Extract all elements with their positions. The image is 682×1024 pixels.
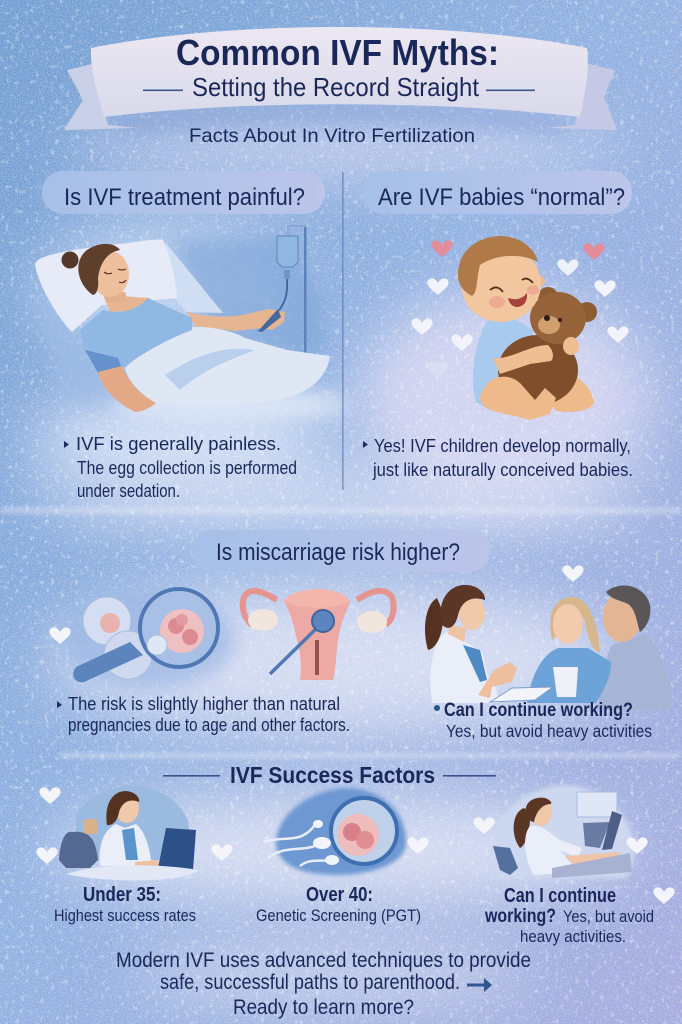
pillow	[35, 240, 177, 332]
ponytail	[514, 808, 530, 848]
embryo	[160, 609, 204, 653]
body text: normal: just like naturally conceived babies.	[372, 459, 633, 480]
factor: continue working	[484, 885, 654, 946]
desk	[552, 853, 632, 878]
band divider	[60, 753, 680, 758]
banner shadow	[110, 104, 575, 135]
divider	[342, 172, 344, 490]
egg cell	[83, 597, 131, 645]
ears	[469, 298, 483, 312]
factor: continue working: working?	[484, 906, 556, 927]
coat	[100, 824, 152, 866]
illustration: patient in hospital bed	[35, 225, 350, 423]
arrow	[467, 978, 492, 992]
small bubble	[147, 635, 167, 655]
clipboard	[490, 687, 553, 702]
factor: under 35	[54, 884, 196, 925]
teddy body	[498, 335, 578, 405]
banner ribbon	[91, 27, 588, 117]
section heading: IVF Success Factors	[230, 762, 435, 788]
monitor	[158, 828, 196, 870]
baby face	[489, 279, 539, 308]
illustration: uterus	[243, 589, 394, 680]
woman face	[553, 604, 583, 644]
baby hair	[458, 236, 538, 296]
body text: risk: pregnancies due to age and other factors.	[68, 714, 350, 735]
factor: continue working: Yes, but avoid	[563, 908, 654, 926]
shirt	[473, 316, 533, 410]
closing message	[116, 949, 531, 1019]
factor: under 35: Under 35:	[83, 884, 161, 906]
face	[115, 793, 139, 823]
woman hair	[550, 597, 600, 652]
subtitle: Setting the Record Straight	[192, 72, 480, 102]
panel: IVF babies normal	[362, 171, 633, 480]
factor: under 35: Highest success rates	[54, 907, 196, 925]
monitor	[583, 822, 610, 848]
body text: painful: The egg collection is performed	[77, 458, 297, 478]
right leg	[549, 370, 594, 412]
near arm	[98, 366, 156, 412]
body text: continue working: Can I continue working?	[444, 700, 633, 721]
hands	[135, 860, 158, 868]
IV device	[257, 309, 281, 332]
left thigh	[480, 377, 556, 420]
baby arm	[493, 345, 553, 374]
body text: continue working	[434, 700, 652, 741]
doctor hair	[441, 585, 485, 628]
blue backdrop	[170, 236, 325, 358]
face	[91, 251, 129, 297]
man shirt	[598, 634, 672, 710]
hearts	[411, 240, 629, 378]
illustration: doctor at computer	[59, 786, 198, 880]
heading pill: normal: Are IVF babies “normal”?	[378, 184, 625, 211]
man hair	[606, 586, 650, 632]
body text: continue working: Yes, but avoid heavy activities	[446, 721, 652, 741]
body text: painful	[64, 433, 297, 501]
teddy head	[530, 292, 586, 344]
arm	[565, 852, 620, 866]
backrest pillow	[165, 242, 223, 313]
illustration: doctor at workstation	[491, 785, 635, 878]
teddy ears	[538, 287, 558, 307]
heading pill: normal	[362, 171, 632, 214]
illustration: baby with teddy bear	[411, 236, 629, 420]
body text: risk: The risk is slightly higher than natural	[68, 693, 340, 714]
woman cardigan	[527, 648, 611, 703]
teddy paw hand	[563, 337, 579, 355]
panel: IVF success factors	[36, 565, 675, 946]
hearts around factors	[36, 565, 675, 904]
baby head	[461, 246, 541, 322]
doctor coat	[431, 632, 498, 703]
illustration: sperm and embryo	[263, 788, 406, 875]
closing message: Ready to learn more?	[233, 996, 414, 1019]
factor: over 40: Over 40:	[306, 884, 373, 906]
ovaries	[248, 609, 278, 631]
doctor scrubs	[463, 645, 487, 682]
banner right tail	[546, 64, 617, 130]
man face	[603, 592, 641, 642]
face details	[104, 269, 126, 283]
hair	[526, 798, 551, 822]
magnifier handle	[73, 642, 143, 682]
chest	[103, 295, 150, 312]
clinic backdrop	[76, 786, 192, 860]
hair bun	[62, 252, 78, 268]
panel: is IVF painful	[35, 171, 350, 501]
mattress shading	[35, 285, 135, 405]
face	[530, 798, 552, 826]
illustration: doctor with couple	[425, 585, 672, 710]
probe	[270, 622, 323, 674]
sperm	[263, 825, 330, 866]
doctor arm	[478, 662, 517, 698]
body text: risk	[57, 693, 350, 735]
far arm	[187, 309, 285, 331]
heading pill: miscarriage	[192, 530, 490, 572]
chart on wall	[577, 792, 617, 817]
panel: miscarriage risk	[57, 530, 672, 741]
title banner	[64, 27, 617, 135]
factor: continue working: heavy activities.	[520, 928, 626, 946]
chair	[59, 832, 98, 868]
lens ring	[331, 798, 397, 864]
doctor face	[459, 596, 485, 630]
coat	[525, 826, 582, 875]
illustration: embryo under magnifier	[65, 589, 235, 688]
wall board	[83, 819, 97, 834]
magnifier lens	[140, 589, 218, 667]
neck	[104, 292, 128, 302]
title: Common IVF Myths:	[176, 32, 499, 73]
cervix canal	[315, 640, 319, 675]
doctor neck	[448, 625, 466, 642]
banner left tail	[64, 64, 137, 130]
uterus body	[284, 601, 350, 680]
heading pill: painful	[42, 171, 325, 214]
closing message: Modern IVF uses advanced techniques to provide	[116, 949, 531, 972]
blanket	[125, 327, 330, 406]
desk	[66, 865, 198, 880]
sleeve	[85, 350, 122, 373]
heading pill: painful: Is IVF treatment painful?	[64, 184, 305, 211]
factor: over 40	[256, 884, 421, 925]
gown	[80, 298, 192, 373]
body text: normal	[363, 435, 633, 480]
body text: painful: under sedation.	[77, 481, 180, 501]
closing message: safe, successful paths to parenthood.	[160, 971, 460, 994]
factor: continue working: Can I continue	[504, 885, 616, 907]
chair	[493, 846, 518, 875]
IV stand	[277, 225, 306, 355]
body text: painful: IVF is generally painless.	[76, 433, 281, 454]
tagline: Facts About In Vitro Fertilization	[189, 126, 475, 147]
snow drift below blanket	[110, 387, 350, 423]
band divider	[0, 507, 682, 514]
hair	[78, 244, 120, 295]
body text: normal: Yes! IVF children develop normally,	[374, 435, 631, 456]
heading pill: miscarriage: Is miscarriage risk higher?	[216, 539, 460, 566]
hair	[106, 791, 139, 825]
doctor ponytail	[425, 598, 443, 650]
embryo	[337, 814, 379, 856]
tubes	[243, 591, 394, 625]
factor: over 40: Genetic Screening (PGT)	[256, 907, 421, 925]
